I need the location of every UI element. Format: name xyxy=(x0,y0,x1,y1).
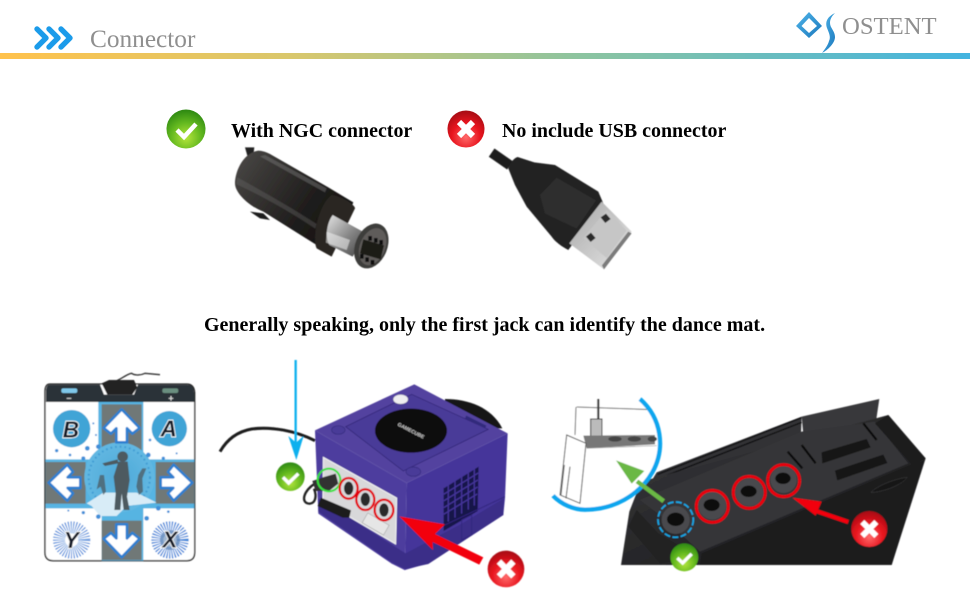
console top xyxy=(315,384,508,483)
logo mark xyxy=(796,12,835,53)
buttons xyxy=(53,410,90,447)
red arrow xyxy=(792,498,849,524)
red cross xyxy=(851,511,887,547)
blue stars xyxy=(55,422,178,521)
red cross xyxy=(488,551,524,587)
dancer silhouettes xyxy=(97,451,146,510)
brand name: OSTENT xyxy=(842,13,937,40)
button letters xyxy=(63,416,179,553)
inset blue arc xyxy=(553,399,660,510)
disc lid xyxy=(375,409,447,453)
jacks xyxy=(662,466,797,534)
gc slots xyxy=(822,439,887,480)
vent grille xyxy=(444,466,479,531)
ports xyxy=(344,482,389,517)
button letters: A xyxy=(159,416,177,442)
heading: NGC: With NGC connector xyxy=(231,120,412,142)
photo: NGC connector xyxy=(235,147,395,274)
heading: USB: No include USB connector xyxy=(502,120,726,142)
red rings xyxy=(340,478,393,520)
photo: USB connector xyxy=(492,153,632,269)
logo xyxy=(796,12,937,53)
green check xyxy=(276,462,305,491)
button letters: X xyxy=(160,526,179,552)
red rings xyxy=(696,465,800,522)
silver port panel xyxy=(323,457,397,544)
photo: dance mat xyxy=(45,373,195,561)
button letters: Y xyxy=(64,527,81,553)
console right face xyxy=(405,433,508,570)
green check xyxy=(670,543,698,571)
blue arrow xyxy=(288,360,304,460)
green ring xyxy=(318,469,340,491)
console left face xyxy=(315,430,407,570)
inset: wii diagram xyxy=(553,399,660,509)
wii body xyxy=(621,415,926,565)
icon: green check, NGC xyxy=(166,110,206,148)
mat body xyxy=(45,384,195,561)
mat blue cross xyxy=(46,402,194,561)
star bursts xyxy=(59,527,183,553)
memory card xyxy=(318,498,351,518)
red arrow xyxy=(399,516,483,565)
photo: GameCube console xyxy=(220,360,524,587)
caption: Generally speaking, only the first jack can identify the dance mat. xyxy=(204,314,765,336)
power cable xyxy=(220,428,315,452)
photo: Wii console xyxy=(553,399,926,571)
section title: Connector xyxy=(90,25,196,53)
icon: red cross, USB xyxy=(448,110,484,148)
green arrow xyxy=(616,460,665,503)
wii open flaps xyxy=(640,417,802,508)
header arrows icon xyxy=(37,29,70,47)
photo: GameCube console: GAMECUBE xyxy=(396,422,426,441)
arrows xyxy=(49,409,192,557)
lower tier line xyxy=(445,497,505,540)
dashed blue ring xyxy=(658,502,693,537)
header gradient bar xyxy=(0,53,970,59)
plugged controller cable xyxy=(304,484,316,504)
button letters: B xyxy=(63,416,79,442)
mat cable xyxy=(117,373,160,381)
controller loop behind xyxy=(445,399,502,428)
